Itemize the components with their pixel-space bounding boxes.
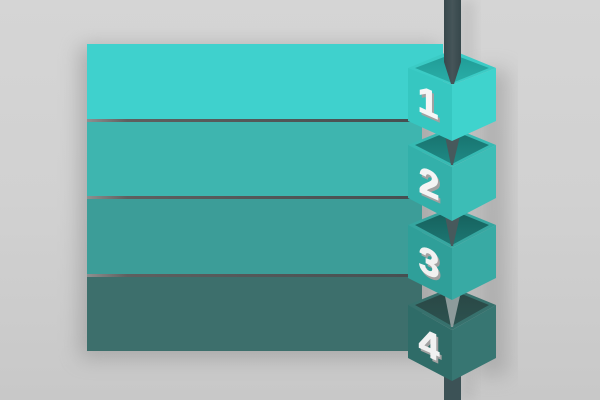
number 3: 3 bbox=[419, 238, 439, 288]
number 1: 1 bbox=[420, 81, 440, 131]
bar 1 bbox=[87, 44, 443, 119]
box 3 bbox=[408, 207, 496, 300]
box 2 rim bbox=[408, 127, 496, 167]
number 2: 2 bbox=[419, 159, 439, 209]
number 4: 4 bbox=[419, 320, 440, 370]
box 3 rim bbox=[408, 207, 496, 248]
box 4 left face bbox=[408, 305, 452, 381]
box 2 right face bbox=[452, 145, 496, 221]
box 4 opening bbox=[415, 290, 489, 326]
box 3 right face bbox=[452, 225, 496, 300]
box 1 right face bbox=[452, 68, 496, 141]
bar 3 bbox=[87, 199, 422, 274]
box 2 pole bbox=[445, 136, 460, 165]
bar 2 bbox=[87, 122, 422, 196]
box 1 bbox=[408, 48, 496, 141]
number 1: 1 bbox=[418, 78, 438, 128]
box 1 rim bbox=[408, 50, 496, 85]
box 4 right face bbox=[452, 305, 496, 381]
number 3: 3 bbox=[421, 241, 441, 291]
box 3 opening bbox=[415, 210, 489, 245]
box 4 pole bbox=[445, 296, 460, 327]
pole shadow bbox=[460, 0, 474, 400]
box 2 bbox=[408, 127, 496, 221]
cube shadow bbox=[476, 70, 508, 375]
box 3 left face bbox=[408, 225, 452, 300]
box 1 opening bbox=[415, 54, 489, 83]
bars bbox=[87, 44, 443, 351]
box 3 pole bbox=[445, 216, 460, 246]
box 1 pole bbox=[444, 48, 461, 84]
box 1 left face bbox=[408, 68, 452, 141]
gap lines bbox=[87, 119, 422, 277]
number 4: 4 bbox=[421, 323, 442, 373]
box 4 rim bbox=[408, 287, 496, 330]
bar shadow bbox=[80, 46, 440, 358]
pole bottom bbox=[444, 370, 461, 400]
box 2 opening bbox=[415, 130, 489, 164]
bar 4 bbox=[87, 277, 422, 351]
pole top bbox=[444, 0, 461, 70]
box 2 left face bbox=[408, 145, 452, 221]
box 4 bbox=[408, 287, 496, 381]
number 2: 2 bbox=[421, 162, 441, 212]
